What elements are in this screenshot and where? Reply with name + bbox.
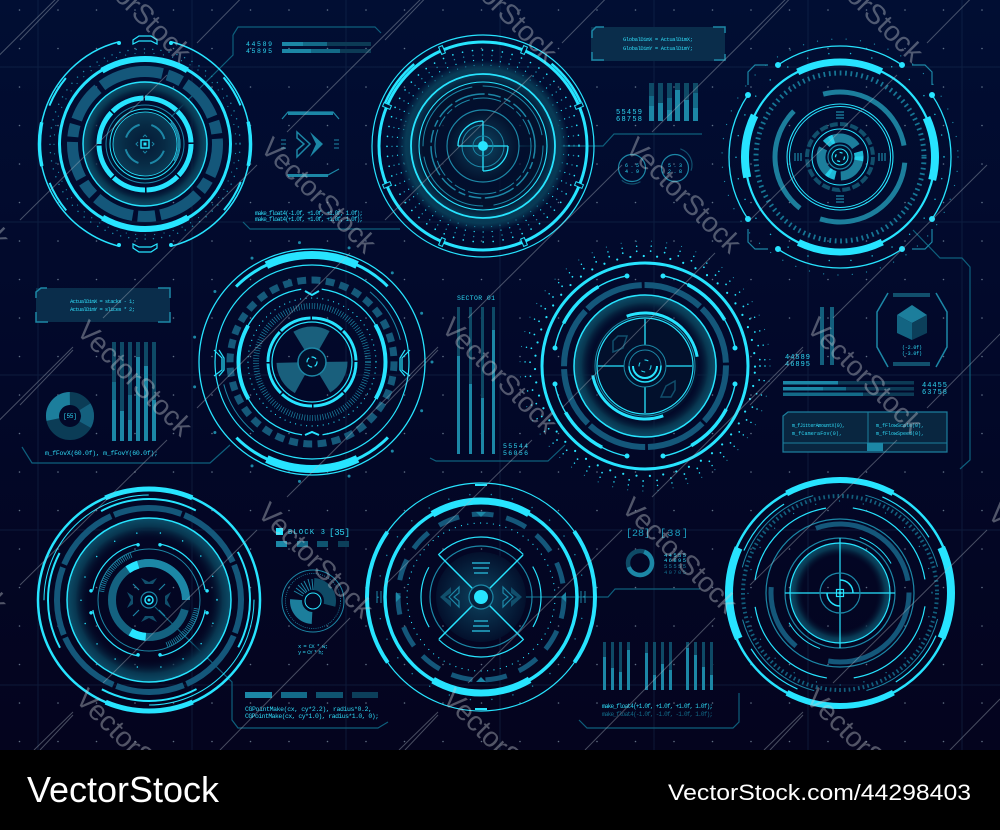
- circle 6: [3, 454, 295, 746]
- watermark text: VectorStock: [616, 491, 744, 620]
- panel: 28 38 donut readout: [28]: [626, 528, 650, 540]
- numbers beside bar chart: 68758: [616, 116, 642, 124]
- small gauges: 4.9: [625, 169, 639, 175]
- small gauges: 6.5: [625, 163, 639, 169]
- bar chart: sector 01: [457, 295, 528, 457]
- donut chart: left: [55]: [63, 413, 77, 420]
- panel: top data readout: [246, 41, 371, 55]
- panel: 28 38 donut readout: [625, 528, 688, 578]
- bar chart: sector 01: SECTOR 01: [457, 295, 495, 302]
- circle 7: [322, 438, 640, 756]
- connector: circle 2 to gauges: [483, 134, 702, 146]
- circle 1: [0, 0, 290, 289]
- icon: cube in hexagon: (-2.0f): [902, 345, 922, 351]
- watermark text: VectorStock: [252, 496, 380, 625]
- donut chart: left: [46, 392, 94, 440]
- panel: CGPoint code: [245, 692, 379, 720]
- connector: circle 7: [481, 589, 700, 597]
- panel: GlobalDim code box: GlobalDimX = ActualDimX;: [623, 36, 693, 43]
- panel: block 3: [276, 528, 350, 547]
- text: make_float code top: make_float4(+1.0f, +1.0f, +1.0f, 1.0f);: [255, 216, 363, 223]
- bar chart: sector 01: 55544: [503, 443, 528, 450]
- panel: GlobalDim code box: GlobalDimY = ActualDimY;: [623, 45, 693, 52]
- panel: right data column: 46895: [785, 361, 810, 369]
- panel: GlobalDim code box: [591, 27, 725, 61]
- text: make_float code bottom: make_float4(-1.0f, -1.0f, -1.0f, 1.0f);: [602, 711, 713, 718]
- panel: 28 38 donut readout: [38]: [660, 528, 688, 540]
- circle 2: [332, 0, 634, 297]
- circle 3: [686, 3, 994, 311]
- panel: flow parameters: m_fFlowSpeed(0),: [876, 431, 924, 437]
- footer band: VectorStock.com/44298403: [668, 780, 971, 805]
- watermark text: VectorStock: [800, 682, 928, 811]
- circle 4: [161, 211, 463, 513]
- icon: top and bottom badges of circle 1: [133, 36, 157, 252]
- watermark text: VectorStock: [437, 682, 565, 811]
- numbers beside bar chart: [616, 109, 642, 124]
- bar chart: left: [112, 342, 156, 441]
- text: block 3 formula: [298, 643, 328, 656]
- small gauges: 5.3: [668, 163, 682, 169]
- panel: ActualDim code box: [36, 288, 170, 322]
- panel: 28 38 donut readout: 55555: [664, 563, 686, 570]
- text: make_float code bottom: make_float4(+1.0f, +1.0f, +1.0f, 1.0f);: [602, 703, 713, 710]
- panel: block 3: BLOCK 3: [288, 529, 325, 537]
- icon: cube in hexagon: [877, 293, 947, 367]
- numbers beside bar chart: 55459: [616, 109, 642, 117]
- footer band: [0, 750, 1000, 830]
- watermark text: VectorStock: [70, 682, 198, 811]
- circle 8: [687, 440, 993, 746]
- small gauges: 2.8: [668, 169, 682, 175]
- panel: ActualDim code box: ActualDimY = slices * 2;: [70, 306, 135, 313]
- panel: 28 38 donut readout: 46895: [664, 557, 686, 564]
- small gauges: [610, 143, 697, 190]
- text: block 3 formula: y = CY * h;: [298, 649, 324, 656]
- panel: flow parameters: [783, 412, 947, 452]
- icon: cube in hexagon: (-3.0f): [902, 351, 922, 357]
- footer band: VectorStock: [27, 769, 220, 810]
- panel: 28 38 donut readout: 40705: [664, 569, 686, 576]
- panel: 28 38 donut readout: 44555: [664, 552, 686, 559]
- panel: flow parameters: m_fCameraFov(0),: [792, 431, 842, 437]
- dial: block 3 gauge: [282, 570, 344, 632]
- text: make_float code bottom: [602, 703, 713, 718]
- panel: CGPoint code: CGPointMake(cx, cy*2.2), radius*0.2,: [245, 706, 372, 713]
- watermark text: VectorStock: [71, 314, 199, 443]
- icon: chevron widget: [281, 112, 339, 177]
- panel: right data column: 44455: [922, 382, 947, 390]
- bar chart: top centre: [649, 83, 698, 121]
- bar chart: bottom centre: [603, 642, 713, 690]
- bar chart: sector 01: 56056: [503, 450, 528, 457]
- panel: flow parameters: m_fFlowScale(0),: [876, 423, 924, 429]
- panel: block 3: [35]: [329, 528, 350, 538]
- circle 5: [520, 241, 770, 491]
- watermark text: VectorStock: [436, 311, 564, 440]
- watermark text: VectorStock: [801, 311, 929, 440]
- text: FOV values: m_fFovX(60.0f), m_fFovY(60.0f);: [45, 450, 158, 457]
- panel: top data readout: 44589: [246, 41, 272, 48]
- panel: right data column: 63758: [922, 389, 947, 397]
- text: make_float code top: [255, 210, 363, 223]
- text: make_float code top: make_float4(-1.0f, +1.0f, +1.0f, 1.0f);: [255, 210, 363, 217]
- watermark text: VectorStock: [620, 131, 748, 260]
- panel: right data column: 44589: [785, 354, 810, 362]
- panel: ActualDim code box: ActualDimX = stacks - 1;: [70, 298, 135, 305]
- text: block 3 formula: x = CX * w;: [298, 643, 328, 650]
- panel: top data readout: 45895: [246, 48, 272, 55]
- panel: flow parameters: m_fJitterAmountX(0),: [792, 423, 845, 429]
- watermark text: VectorStock: [255, 131, 383, 260]
- panel: right data column: [783, 307, 947, 397]
- panel: CGPoint code: CGPointMake(cx, cy*1.0), radius*1.0, 0);: [245, 713, 379, 720]
